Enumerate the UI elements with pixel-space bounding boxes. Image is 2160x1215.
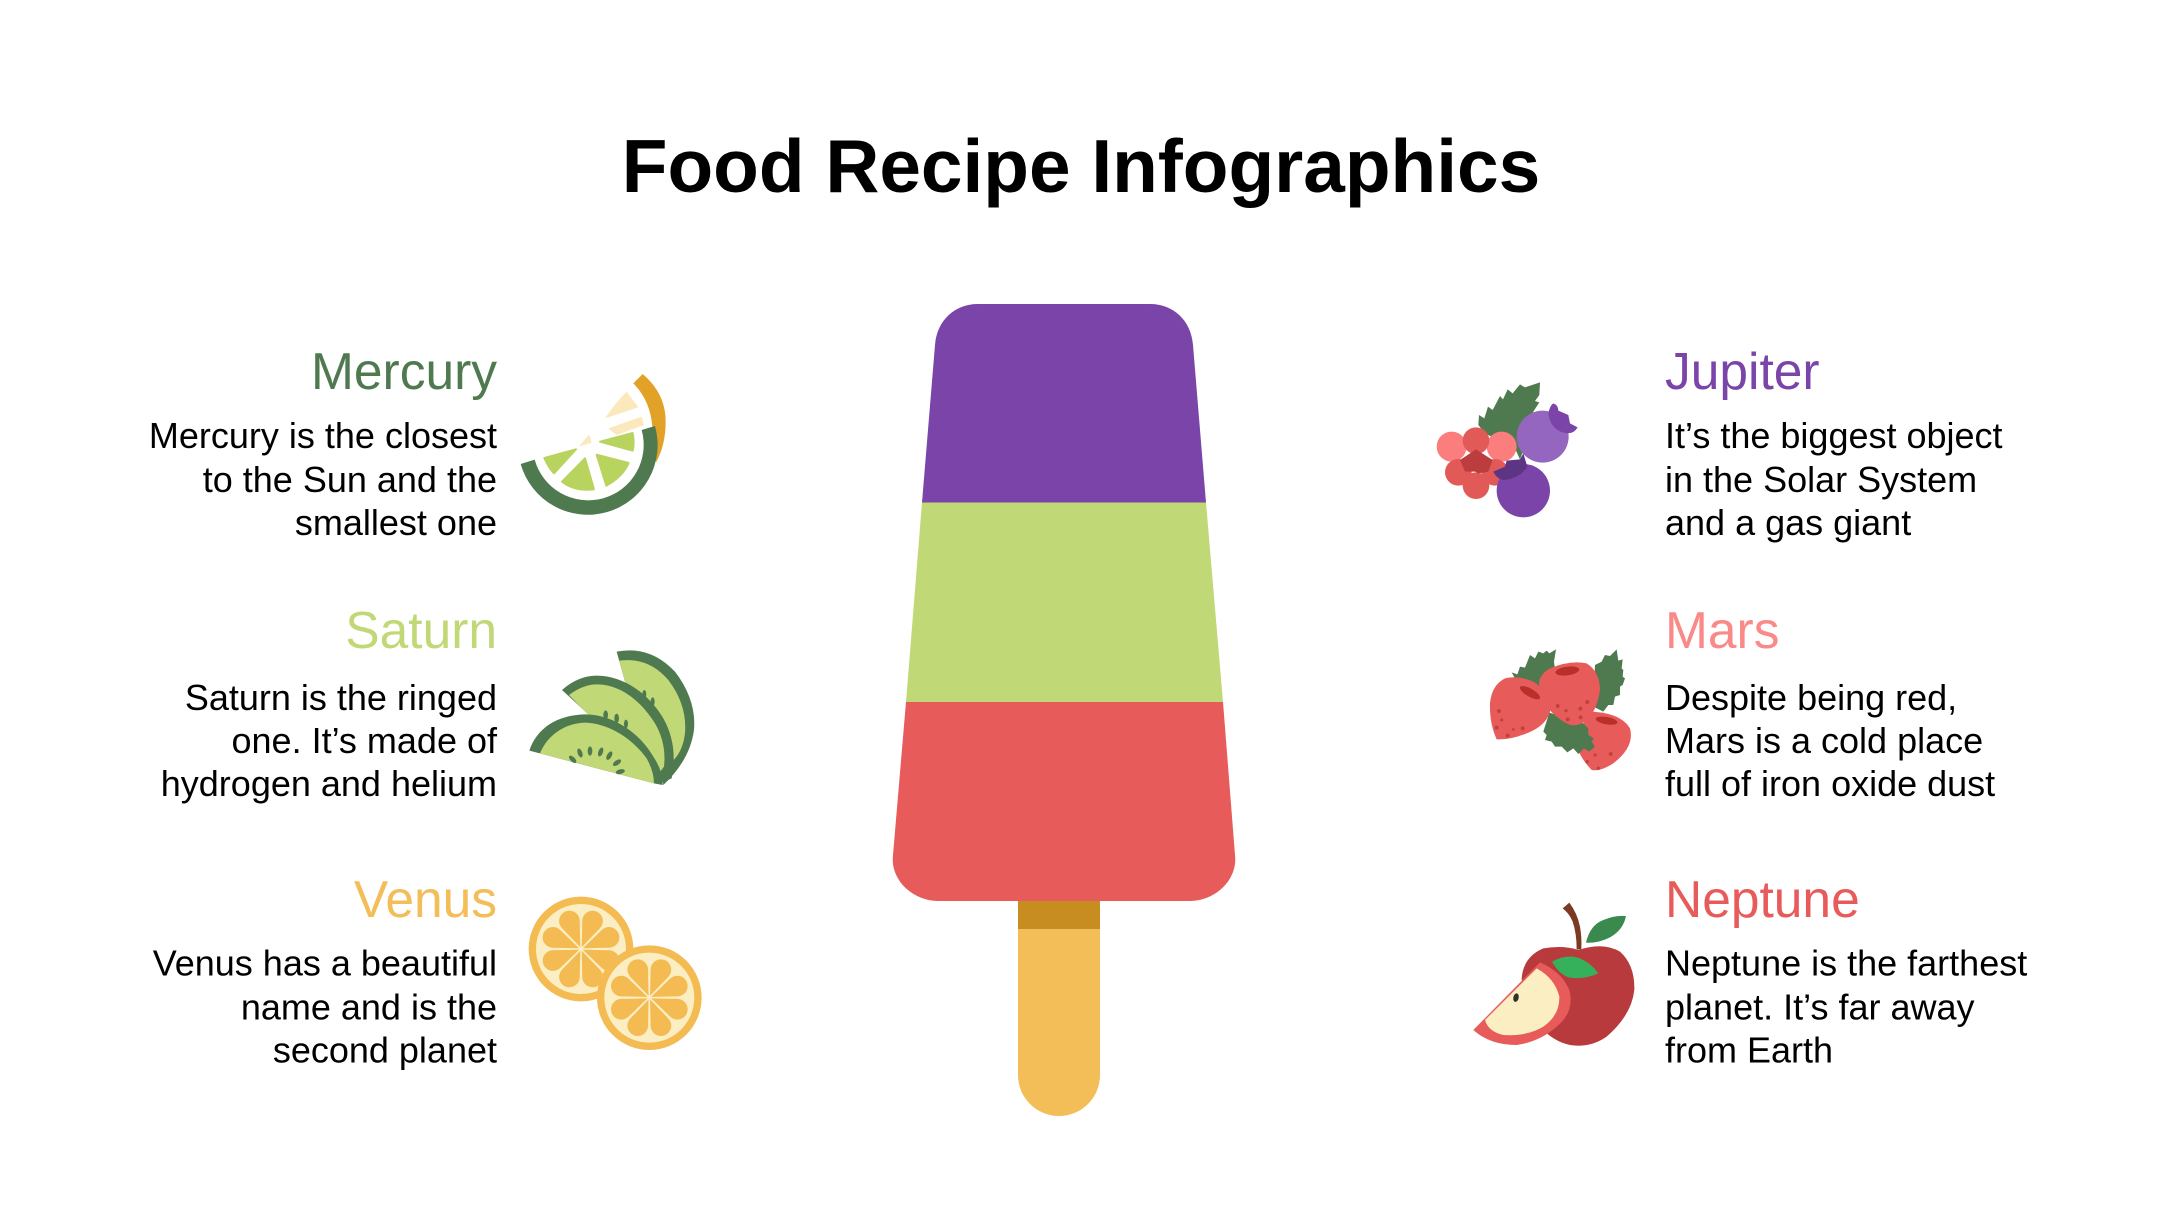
purple layer bbox=[922, 304, 1206, 502]
icon: kiwi slices bbox=[529, 650, 694, 785]
icon: berries bbox=[1437, 382, 1578, 517]
block: Jupiter: Jupiter bbox=[1665, 342, 1820, 400]
block: Mars: full of iron oxide dust bbox=[1665, 763, 1995, 804]
block: Jupiter: It’s the biggest object bbox=[1665, 415, 2003, 456]
block: Mars bbox=[1665, 601, 1995, 804]
icon: orange slices bbox=[529, 897, 702, 1050]
block: Mars: Despite being red, bbox=[1665, 677, 1957, 718]
block: Neptune: Neptune is the farthest bbox=[1665, 942, 2027, 984]
title: Food Recipe Infographics bbox=[622, 124, 1540, 208]
block: Mercury bbox=[149, 342, 497, 543]
block: Jupiter bbox=[1665, 342, 2003, 543]
block: Mars: Mars bbox=[1665, 601, 1779, 659]
block: Mercury: Mercury is the closest bbox=[149, 415, 497, 456]
block: Saturn: Saturn is the ringed bbox=[185, 677, 497, 718]
block: Jupiter: in the Solar System bbox=[1665, 459, 1977, 500]
block: Neptune: from Earth bbox=[1665, 1030, 1833, 1070]
block: Neptune bbox=[1665, 870, 2027, 1070]
block: Venus: Venus bbox=[354, 870, 497, 928]
block: Saturn: hydrogen and helium bbox=[161, 763, 497, 804]
block: Saturn: Saturn bbox=[345, 601, 497, 659]
block: Venus: second planet bbox=[273, 1030, 497, 1070]
stick shadow bbox=[1018, 895, 1100, 929]
block: Venus: Venus has a beautiful bbox=[153, 942, 497, 984]
popsicle bbox=[893, 304, 1235, 1116]
block: Saturn bbox=[161, 601, 498, 804]
red layer bbox=[893, 702, 1235, 901]
block: Neptune: planet. It’s far away bbox=[1665, 986, 1974, 1028]
block: Jupiter: and a gas giant bbox=[1665, 502, 1911, 543]
icon: lime slices bbox=[521, 374, 666, 515]
popsicle stick bbox=[1018, 895, 1100, 1116]
block: Mercury: to the Sun and the bbox=[203, 459, 497, 500]
block: Neptune: Neptune bbox=[1665, 870, 1860, 928]
block: Mercury: smallest one bbox=[295, 502, 497, 543]
block: Venus bbox=[153, 870, 497, 1070]
green layer bbox=[906, 502, 1223, 702]
block: Mars: Mars is a cold place bbox=[1665, 720, 1983, 761]
block: Mercury: Mercury bbox=[311, 342, 497, 400]
block: Saturn: one. It’s made of bbox=[232, 720, 498, 761]
icon: strawberries bbox=[1490, 649, 1631, 770]
icon: apple bbox=[1473, 903, 1634, 1046]
block: Venus: name and is the bbox=[241, 986, 497, 1028]
